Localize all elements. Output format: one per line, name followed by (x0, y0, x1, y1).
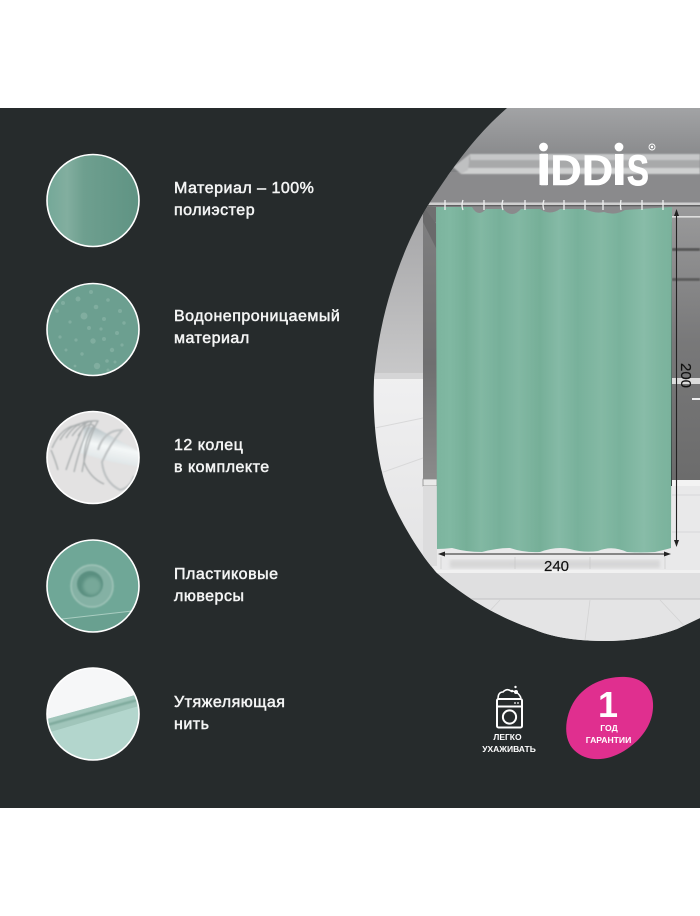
left white tiles (374, 374, 423, 556)
text: weighted thread: нить (174, 716, 209, 732)
rail (428, 202, 700, 205)
curtain shadow on bath (450, 560, 660, 568)
left wall (370, 205, 430, 375)
pink warranty badge: 1 (598, 684, 618, 725)
dimension: height 200: 200 (677, 363, 694, 388)
curtain (436, 207, 672, 552)
curtain rings (445, 200, 663, 210)
easy care caption: УХАЖИВАТЬ (482, 744, 536, 754)
dimension: width 240: 240 (544, 558, 569, 575)
pink warranty badge (566, 677, 653, 759)
text: rings: 12 колец (174, 437, 243, 454)
icon: weighted thread (47, 668, 139, 765)
text: grommets: люверсы (174, 588, 244, 604)
text: rings (174, 437, 270, 476)
easy care caption (482, 732, 536, 754)
text: weighted thread (174, 694, 285, 732)
dark strip left of curtain (423, 222, 437, 480)
text: material: полиэстер (174, 202, 255, 218)
room photo (370, 108, 700, 650)
icon: plastic grommet (47, 540, 139, 640)
bath rim (423, 479, 437, 486)
text: weighted thread: Утяжеляющая (174, 694, 285, 711)
text: material: Материал – 100% (174, 180, 314, 197)
text: material (174, 180, 314, 219)
logo: iDDiS: S (627, 147, 649, 195)
pink warranty badge: ГОД (600, 723, 618, 733)
text: grommets: Пластиковые (174, 566, 278, 583)
dimension: width 240 (438, 552, 671, 575)
easy care caption: ЛЕГКО (493, 732, 522, 742)
bath side (423, 486, 700, 586)
dark panel (0, 108, 700, 808)
main artwork (46, 108, 700, 761)
text: waterproof (174, 308, 340, 347)
icon: water drops (47, 284, 139, 376)
pink warranty badge: ГАРАНТИИ (586, 735, 631, 745)
text: grommets (174, 566, 278, 605)
dimension: height 200 (674, 209, 694, 547)
upper wall (418, 172, 700, 222)
ceiling (448, 108, 700, 176)
logo: iDDiS: iDD (538, 147, 613, 195)
right wall strip (672, 207, 700, 480)
logo: iDDiS (538, 143, 655, 195)
icon: washing machine (497, 686, 522, 728)
icon: curtain rings on rod (47, 412, 140, 504)
text: rings: в комплекте (174, 458, 270, 476)
cornice moulding (453, 154, 700, 174)
icon: fabric swatch (47, 154, 139, 246)
floor (434, 570, 700, 641)
text: waterproof: Водонепроницаемый (174, 308, 340, 325)
text: waterproof: материал (174, 330, 250, 346)
